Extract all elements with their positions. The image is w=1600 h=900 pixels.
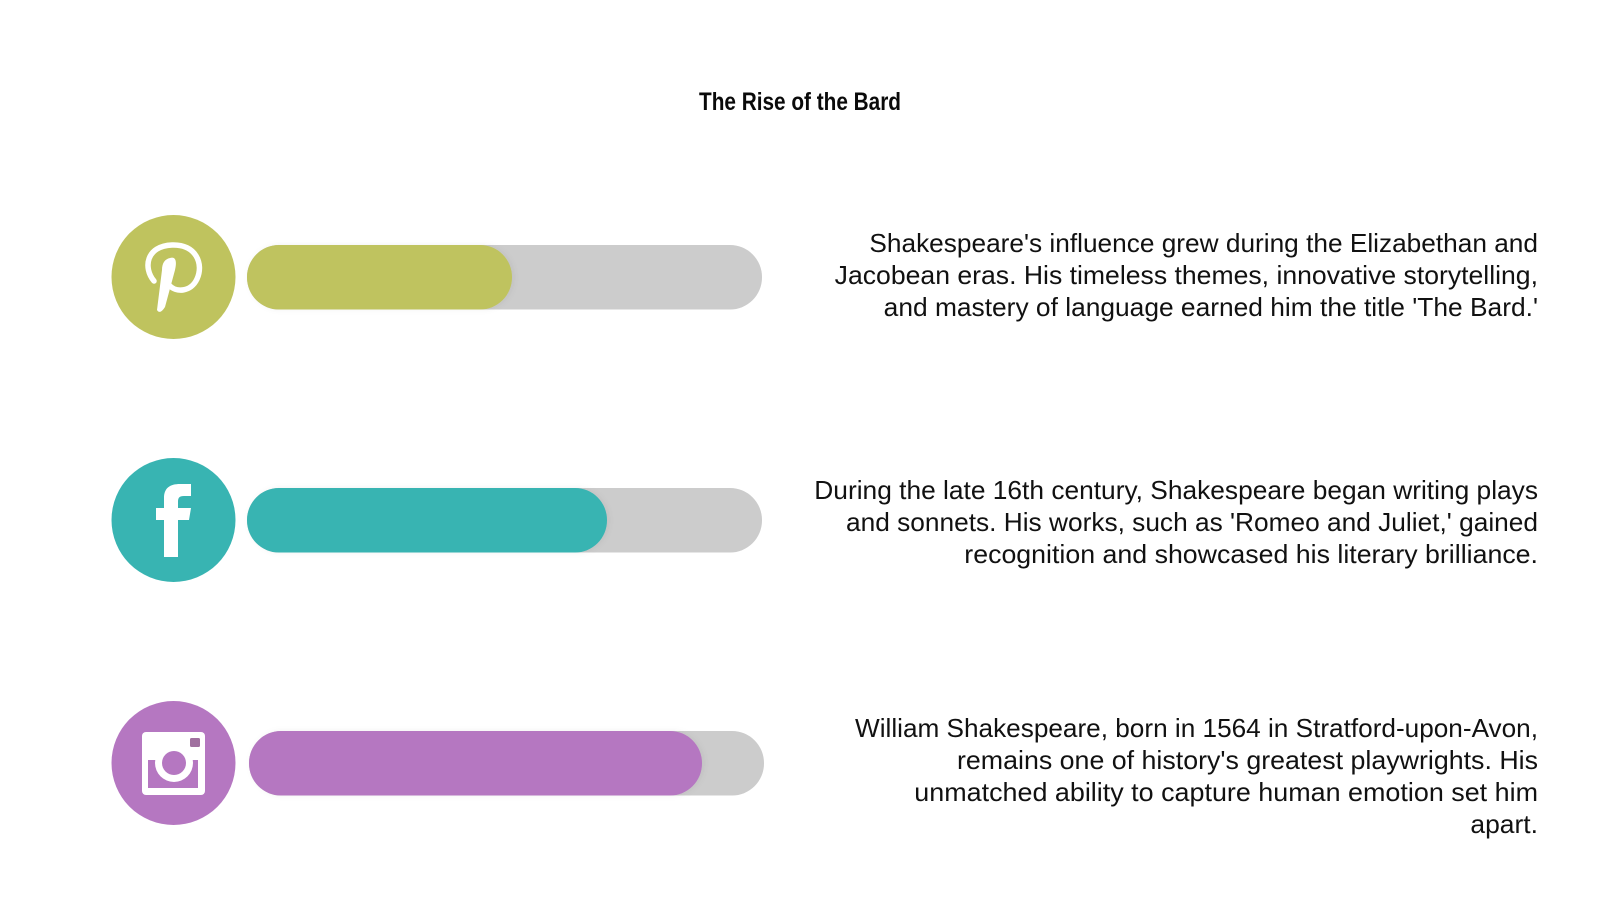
progress bar: teal [247, 488, 762, 552]
icon: pinterest circle [112, 215, 236, 339]
panel: row 1, The Bard [112, 215, 1538, 339]
text block: influence: Shakespeare's influence grew during the Elizabethan and [869, 228, 1538, 258]
progress bar: purple [249, 731, 764, 796]
icon: instagram circle [112, 701, 236, 825]
text block: plays and sonnets: and sonnets. His works, such as 'Romeo and Juliet,' gained [846, 507, 1538, 537]
icon: facebook circle [112, 458, 236, 582]
text block: influence: and mastery of language earned him the title 'The Bard.' [884, 292, 1538, 322]
text block: plays and sonnets: recognition and showcased his literary brilliance. [964, 539, 1538, 569]
panel: row 2, early works [112, 458, 1538, 582]
panel: row 3, birth and legacy [112, 701, 1538, 839]
progress bar: olive [247, 245, 762, 310]
text block: plays and sonnets: During the late 16th century, Shakespeare began writing plays [814, 475, 1538, 505]
title: The Rise of the Bard [699, 88, 901, 116]
text block: influence [835, 228, 1538, 322]
text block: influence: Jacobean eras. His timeless themes, innovative storytelling, [835, 260, 1538, 290]
text block: born in 1564 [855, 713, 1538, 839]
text block: plays and sonnets [814, 475, 1538, 569]
text block: born in 1564: remains one of history's greatest playwrights. His [957, 745, 1538, 775]
text block: born in 1564: apart. [1470, 809, 1538, 839]
text block: born in 1564: unmatched ability to capture human emotion set him [914, 777, 1538, 807]
text block: born in 1564: William Shakespeare, born in 1564 in Stratford-upon-Avon, [855, 713, 1538, 743]
